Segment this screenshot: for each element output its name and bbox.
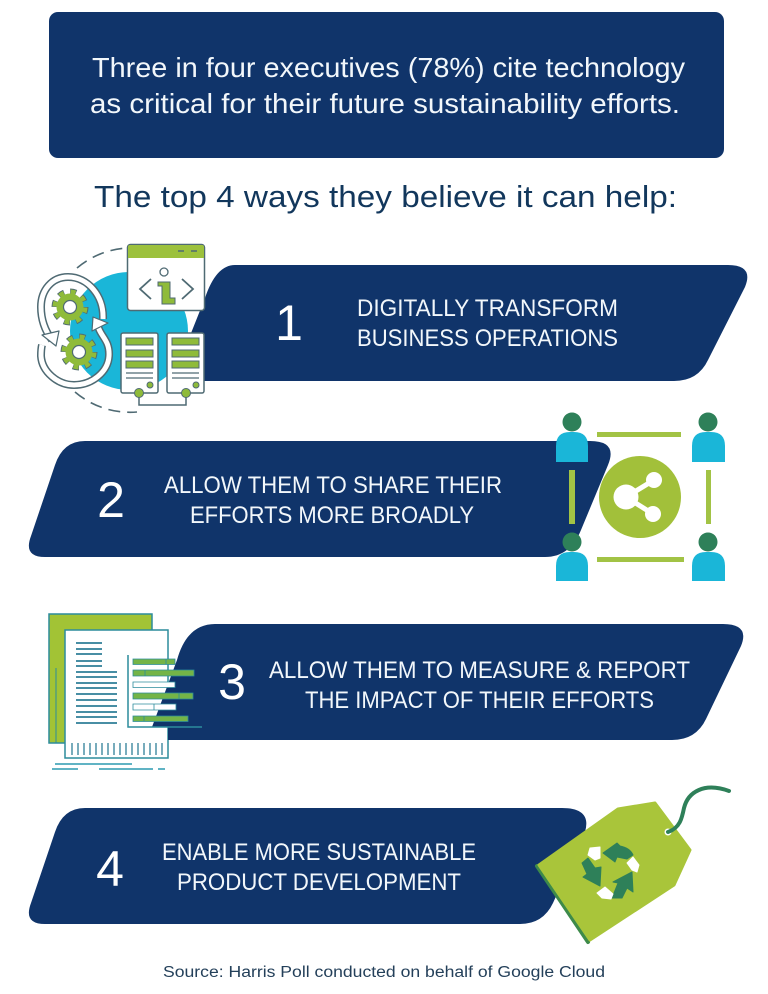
source note: Source: Harris Poll conducted on behalf of Google Cloud — [163, 964, 605, 981]
panel: way 1 banner: BUSINESS OPERATIONS — [357, 325, 618, 352]
panel: way 2 banner: ALLOW THEM TO SHARE THEIR — [164, 472, 502, 499]
icon: sharing network — [556, 412, 725, 581]
icon: code window — [128, 244, 204, 310]
icon: recycle arrows — [582, 843, 639, 899]
panel: way 1 banner — [172, 265, 747, 381]
icon: person bottom right — [692, 532, 725, 581]
panel: way 3 banner — [152, 624, 743, 740]
panel: way 3 banner: 3 — [218, 654, 246, 710]
heading: The top 4 ways they believe it can help: — [94, 179, 677, 214]
panel: header statement: as critical for their future sustainability efforts. — [90, 88, 680, 119]
icon: server right — [167, 333, 204, 393]
panel: way 1 banner: DIGITALLY TRANSFORM — [357, 295, 618, 322]
icon: person bottom left — [556, 532, 588, 581]
panel: way 4 banner — [29, 808, 586, 924]
panel: way 2 banner: EFFORTS MORE BROADLY — [190, 502, 474, 529]
icon: person top right — [692, 412, 725, 462]
panel: way 2 banner — [29, 441, 611, 557]
panel: way 1 banner: 1 — [275, 295, 303, 351]
icon: person top left — [556, 412, 588, 462]
panel: way 2 banner: 2 — [97, 472, 125, 528]
icon: upper gear — [56, 293, 84, 321]
icon: recycling tag — [537, 788, 729, 942]
panel: header statement — [49, 12, 724, 158]
bar chart — [128, 655, 202, 727]
panel: way 4 banner: 4 — [96, 841, 124, 897]
panel: way 4 banner: PRODUCT DEVELOPMENT — [177, 869, 461, 896]
icon: report document pages — [49, 614, 168, 769]
panel: way 3 banner: ALLOW THEM TO MEASURE & REPORT — [269, 657, 690, 684]
icon: gears, window and servers — [41, 244, 204, 412]
icon: server left — [121, 333, 158, 393]
icon: share symbol — [599, 456, 681, 538]
icon: circular arrows — [41, 277, 109, 385]
panel: way 4 banner: ENABLE MORE SUSTAINABLE — [162, 839, 476, 866]
icon: string — [668, 788, 729, 832]
panel: way 3 banner: THE IMPACT OF THEIR EFFORTS — [305, 687, 654, 714]
panel: header statement: Three in four executives (78%) cite technology — [92, 52, 685, 83]
icon: lower gear — [65, 338, 93, 366]
